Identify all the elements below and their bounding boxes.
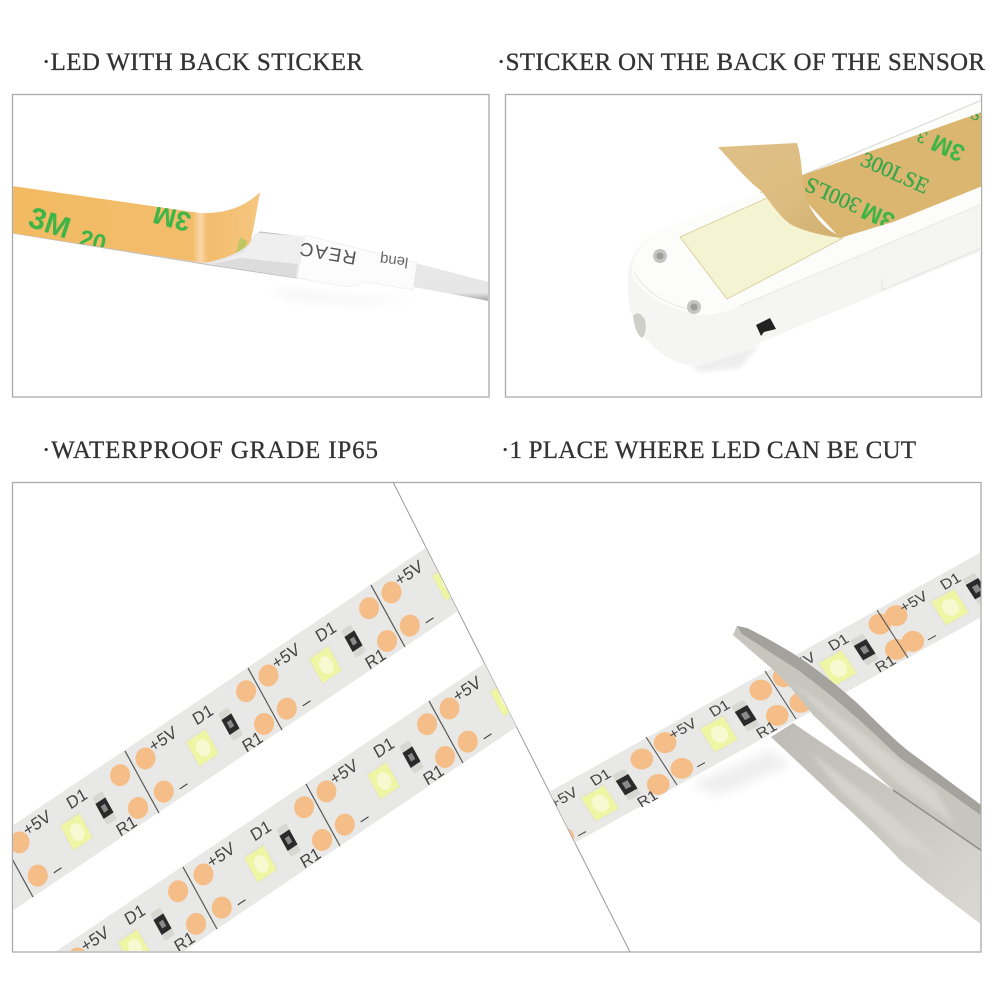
exposed foam pad: [680, 198, 843, 299]
LED strip A: –: [49, 858, 66, 880]
LED strip C: +5V: [785, 649, 820, 677]
LED strip C: +5V: [547, 784, 582, 812]
shadow under strip: [700, 752, 784, 793]
LED strip B: +5V: [78, 922, 113, 956]
LED strip B: +5V: [450, 672, 485, 706]
LED strip C: R1: [753, 719, 780, 742]
peeled 3M tape: 3M: [150, 199, 194, 237]
soft shadow under strip: [270, 288, 420, 304]
LED strip C: D1: [588, 766, 614, 790]
LED strip A: D1: [63, 784, 90, 813]
LED strip C: –: [923, 628, 940, 646]
peeled 3M tape: 20: [76, 225, 109, 258]
LED strip A: R1: [485, 562, 512, 590]
cable hole: [633, 313, 646, 338]
tan liner on bar: 300LS: [801, 172, 865, 219]
LED strip C: –: [811, 689, 828, 707]
LED strip A: +5V: [392, 556, 427, 590]
LED strip C: D1: [938, 570, 964, 594]
slide switch: [756, 318, 776, 336]
LED strip A: –: [421, 608, 438, 630]
LED strip C: +5V: [666, 715, 701, 743]
panel: waterproof and cut photo: [12, 482, 982, 953]
LED strip A: D1: [435, 534, 462, 563]
tan liner on bar: S: [968, 106, 983, 125]
strip base under tape: [12, 232, 303, 278]
LED strip C: D1: [826, 631, 852, 655]
LED strip A: –: [298, 691, 315, 713]
LED strip C: R1: [872, 653, 899, 676]
sensor shadow: [694, 347, 756, 372]
LED strip B: +5V: [327, 755, 362, 789]
panel: sticker on sensor back: [506, 94, 985, 397]
LED strip A: D1: [312, 617, 339, 646]
heading: sticker on the back of the sensor: ·STICKER ON THE BACK OF THE SENSOR: [497, 49, 985, 76]
LED strip A: R1: [239, 728, 266, 756]
tan liner on bar: 300LSE: [857, 146, 933, 199]
LED strip A: –: [175, 774, 192, 796]
cable: [414, 263, 489, 301]
LED strip C: –: [692, 755, 709, 773]
LED strip C: [549, 553, 980, 842]
LED strip B: R1: [420, 761, 447, 789]
tan liner on bar: [800, 106, 985, 238]
LED strip B: D1: [370, 733, 397, 762]
white label on cable: [297, 235, 417, 290]
LED strip B: D1: [493, 650, 520, 679]
LED strip B: –: [479, 724, 496, 746]
LED strip B: –: [356, 807, 373, 829]
tan liner on bar: 3: [914, 126, 930, 148]
tan liner on bar: 3M: [857, 196, 899, 235]
LED strip B: [57, 664, 516, 951]
LED strip B: D1: [121, 900, 148, 929]
heading: cut place: ·1 PLACE WHERE LED CAN BE CUT: [501, 437, 916, 464]
scissors: [733, 626, 985, 927]
peeled 3M tape: [12, 186, 260, 263]
connector sleeve: [215, 233, 304, 278]
lower blade: [771, 723, 985, 927]
peeled liner corner: [718, 143, 842, 238]
white label on cable: REAC: [298, 237, 358, 268]
LED strip C: D1: [707, 697, 733, 721]
screws: [653, 249, 701, 314]
LED strip A: R1: [113, 812, 140, 840]
LED strip B: D1: [247, 816, 274, 845]
LED strip C: R1: [634, 788, 661, 811]
LED strip B: +5V: [204, 838, 239, 872]
sensor body: [628, 99, 982, 365]
LED strip A: R1: [362, 645, 389, 673]
white label on cable: lenq: [379, 250, 409, 271]
LED strip A: [13, 548, 458, 910]
LED strip C: –: [573, 824, 590, 842]
LED strip A: +5V: [269, 639, 304, 673]
peeled 3M tape: 3M: [25, 201, 74, 246]
LED strip B: –: [233, 890, 250, 912]
strips clipped to waterproof side: [13, 548, 516, 951]
LED strip B: R1: [543, 678, 570, 706]
LED strip A: +5V: [146, 722, 181, 756]
LED strip A: D1: [189, 700, 216, 729]
heading: LED with back sticker: ·LED WITH BACK STICKER: [42, 49, 363, 76]
panel: LED with back sticker: [12, 94, 489, 397]
LED strip B: R1: [297, 844, 324, 872]
LED strip A: +5V: [20, 806, 55, 840]
upper blade: [733, 626, 985, 853]
tan liner on bar: 3M: [927, 128, 969, 167]
heading: waterproof grade: ·WATERPROOF GRADE IP65: [42, 437, 378, 464]
LED strip B: R1: [171, 928, 198, 956]
LED strip C: +5V: [897, 588, 932, 616]
strip and scissors clipped to cut side: [549, 553, 980, 924]
